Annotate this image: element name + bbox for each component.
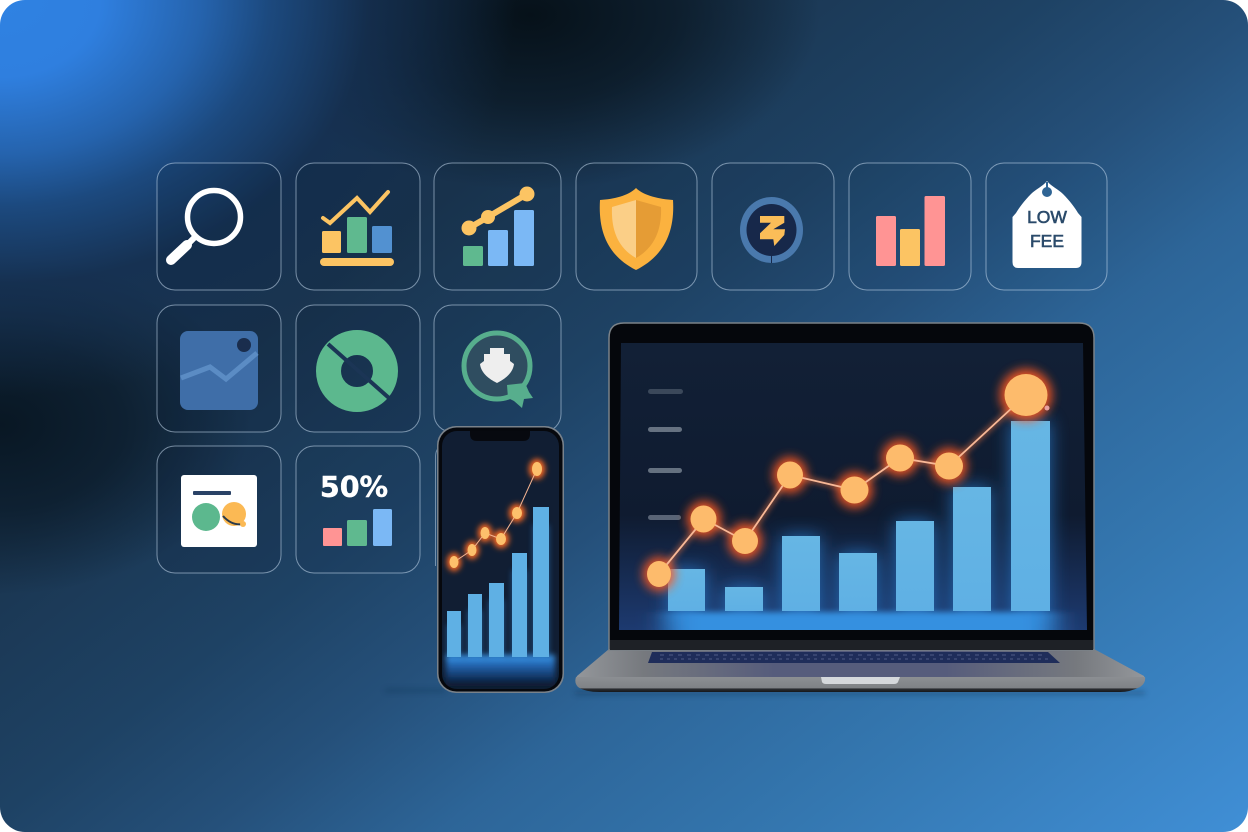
icon: blue area chart tile xyxy=(180,331,258,410)
card: growth bars xyxy=(434,163,561,290)
trackpad notch xyxy=(821,677,900,684)
infographic scene xyxy=(156,162,1146,698)
bar glow xyxy=(668,421,1050,619)
card: pink bars xyxy=(849,163,971,290)
laptop line chart xyxy=(643,369,1052,591)
card: bars with trend line xyxy=(296,163,420,290)
card: search xyxy=(157,163,281,290)
icon: rising bars with dotted line xyxy=(462,186,534,266)
card: badge xyxy=(434,305,561,432)
icon: low fee price tag xyxy=(1012,181,1082,268)
smartphone xyxy=(437,426,564,693)
icon: download badge xyxy=(464,333,533,408)
phone line chart xyxy=(447,459,545,571)
icon: small bars xyxy=(323,509,392,546)
card: area chart xyxy=(157,305,281,432)
phone bar halo xyxy=(447,525,549,659)
icon: lightning coin xyxy=(740,197,803,263)
axis dashes xyxy=(648,389,683,520)
card: shield xyxy=(576,163,697,290)
card: 50 percent xyxy=(296,446,420,573)
icon: white report sheet xyxy=(181,475,257,547)
icon: donut chart xyxy=(328,342,389,400)
laptop bar chart xyxy=(668,421,1050,611)
card: hidden behind phone xyxy=(436,446,445,566)
device shadows xyxy=(385,689,1145,695)
laptop base xyxy=(575,649,1145,692)
phone screen xyxy=(442,431,559,689)
keyboard xyxy=(648,652,1060,663)
icon: coral bar chart xyxy=(876,196,945,266)
text: LOW FEE: LOW xyxy=(1027,207,1067,227)
text: LOW FEE: FEE xyxy=(1030,231,1064,251)
card: lightning coin xyxy=(712,163,834,290)
icon: bar chart with line xyxy=(320,192,394,266)
card: slides xyxy=(157,446,281,573)
phone bar chart xyxy=(447,507,549,657)
laptop screen xyxy=(619,343,1087,648)
icon: magnifying glass xyxy=(171,190,240,260)
card: low fee xyxy=(986,163,1107,290)
icon: shield xyxy=(600,188,673,270)
laptop xyxy=(575,323,1145,692)
laptop lid xyxy=(609,323,1094,650)
text: 50%: 50% xyxy=(320,471,388,504)
phone base glow xyxy=(446,655,555,686)
base glow xyxy=(648,608,1073,630)
card: donut xyxy=(296,305,420,432)
